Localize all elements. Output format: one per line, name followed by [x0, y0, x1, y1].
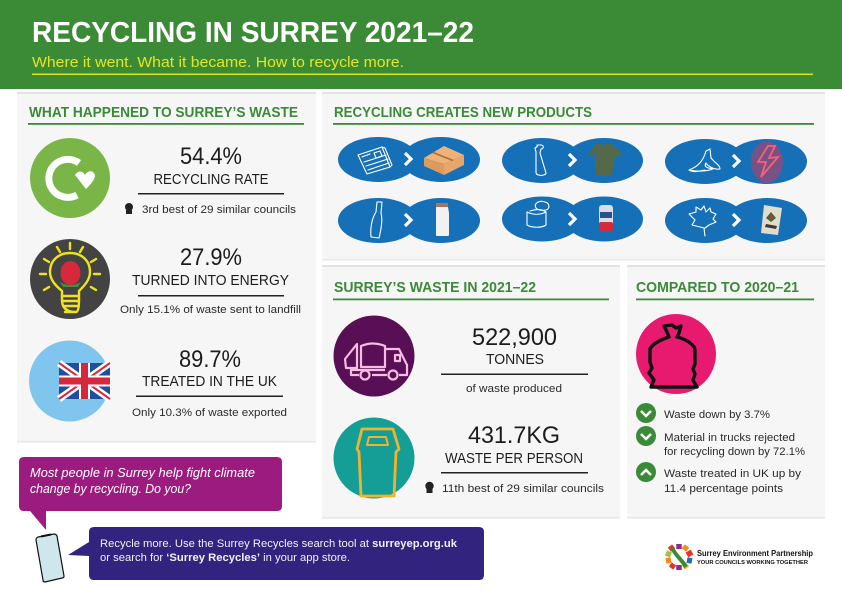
icon: recycling loop	[30, 138, 110, 218]
logo: Surrey Environment Partnership: Surrey Environment Partnership	[697, 549, 813, 558]
product pair: banana skin to energy bolt	[665, 139, 807, 184]
heading: COMPARED TO 2020–21	[636, 279, 799, 296]
subtitle: Where it went. What it became. How to recycle more.	[32, 54, 404, 71]
callout: recycle more: or search for ‘Surrey Recycles’ in your app store.	[100, 552, 350, 564]
stat: treated in the UK: 89.7%	[179, 346, 241, 373]
icon: rubbish bag	[636, 314, 716, 394]
heading: RECYCLING CREATES NEW PRODUCTS	[334, 104, 592, 121]
stat: waste per person: 11th best of 29 similar councils	[442, 483, 605, 495]
callout: climate change question	[19, 457, 282, 530]
change: rejected material down: Material in trucks rejected	[664, 432, 795, 444]
stat: treated in the UK: Only 10.3% of waste exported	[132, 407, 287, 419]
callout: climate change question: change by recycling. Do you?	[30, 482, 191, 496]
change: treated in UK up: 11.4 percentage points	[664, 483, 784, 495]
stat: waste per person: 431.7KG	[468, 422, 560, 449]
stat: waste per person	[425, 422, 605, 495]
change: treated in UK up	[636, 462, 802, 495]
stat: tonnes: 522,900	[472, 324, 557, 351]
callout: climate change question: Most people in Surrey help fight climate	[30, 466, 255, 480]
icon: refuse truck	[334, 316, 414, 396]
stat: turned into energy: 27.9%	[180, 244, 242, 271]
stat: waste per person: WASTE PER PERSON	[445, 450, 583, 467]
stat: turned into energy: TURNED INTO ENERGY	[132, 272, 289, 289]
panel: compared to 2020-21	[627, 265, 825, 518]
icon: union flag	[29, 340, 110, 422]
heading: WHAT HAPPENED TO SURREY’S WASTE	[29, 104, 298, 121]
stat: tonnes: of waste produced	[466, 383, 562, 395]
stat: recycling rate: RECYCLING RATE	[154, 171, 268, 188]
stat: recycling rate: 3rd best of 29 similar councils	[142, 204, 297, 216]
heading: SURREY’S WASTE IN 2021–22	[334, 279, 536, 296]
icon: light bulb with strawberry	[30, 239, 110, 319]
icon: smartphone	[36, 534, 64, 582]
panel: recycling creates new products	[322, 92, 825, 260]
stat: recycling rate	[125, 143, 297, 216]
product pair: tin can to drinks can	[502, 196, 643, 242]
stat: tonnes: TONNES	[486, 351, 544, 368]
icon: rosette	[125, 203, 133, 214]
stat: turned into energy	[120, 244, 301, 316]
change: rejected material down: for recycling down by 72.1%	[664, 446, 805, 458]
logo mark	[666, 544, 692, 570]
stat: recycling rate: 54.4%	[180, 143, 242, 170]
title: RECYCLING IN SURREY 2021–22	[32, 17, 474, 49]
callout: recycle more	[68, 527, 484, 580]
callout: recycle more: Recycle more. Use the Surrey Recycles search tool at surreyep.org.uk	[100, 538, 458, 550]
panel: what happened to Surrey's waste	[17, 92, 316, 442]
logo: Surrey Environment Partnership	[666, 544, 813, 570]
stat: treated in the UK	[132, 346, 287, 419]
change: rejected material down	[636, 426, 805, 458]
stat: tonnes	[441, 324, 588, 395]
header banner	[0, 0, 842, 89]
product pair: glass bottle to metal flask	[338, 198, 480, 243]
panel: Surrey's waste in 2021-22	[322, 265, 620, 518]
stat: treated in the UK: TREATED IN THE UK	[142, 373, 277, 390]
stat: turned into energy: Only 15.1% of waste sent to landfill	[120, 304, 301, 316]
change: waste down: Waste down by 3.7%	[664, 409, 770, 421]
change: treated in UK up: Waste treated in UK up by	[664, 468, 802, 480]
icon: wheelie bin	[334, 418, 414, 498]
logo: Surrey Environment Partnership: YOUR COUNCILS WORKING TOGETHER	[697, 560, 808, 566]
icon: rosette	[425, 482, 434, 493]
change: waste down	[636, 403, 770, 423]
product pair: leaf to compost bag	[665, 198, 807, 243]
product pair: newspaper to cardboard box	[338, 137, 480, 182]
product pair: plastic bottle to t-shirt	[502, 138, 643, 183]
